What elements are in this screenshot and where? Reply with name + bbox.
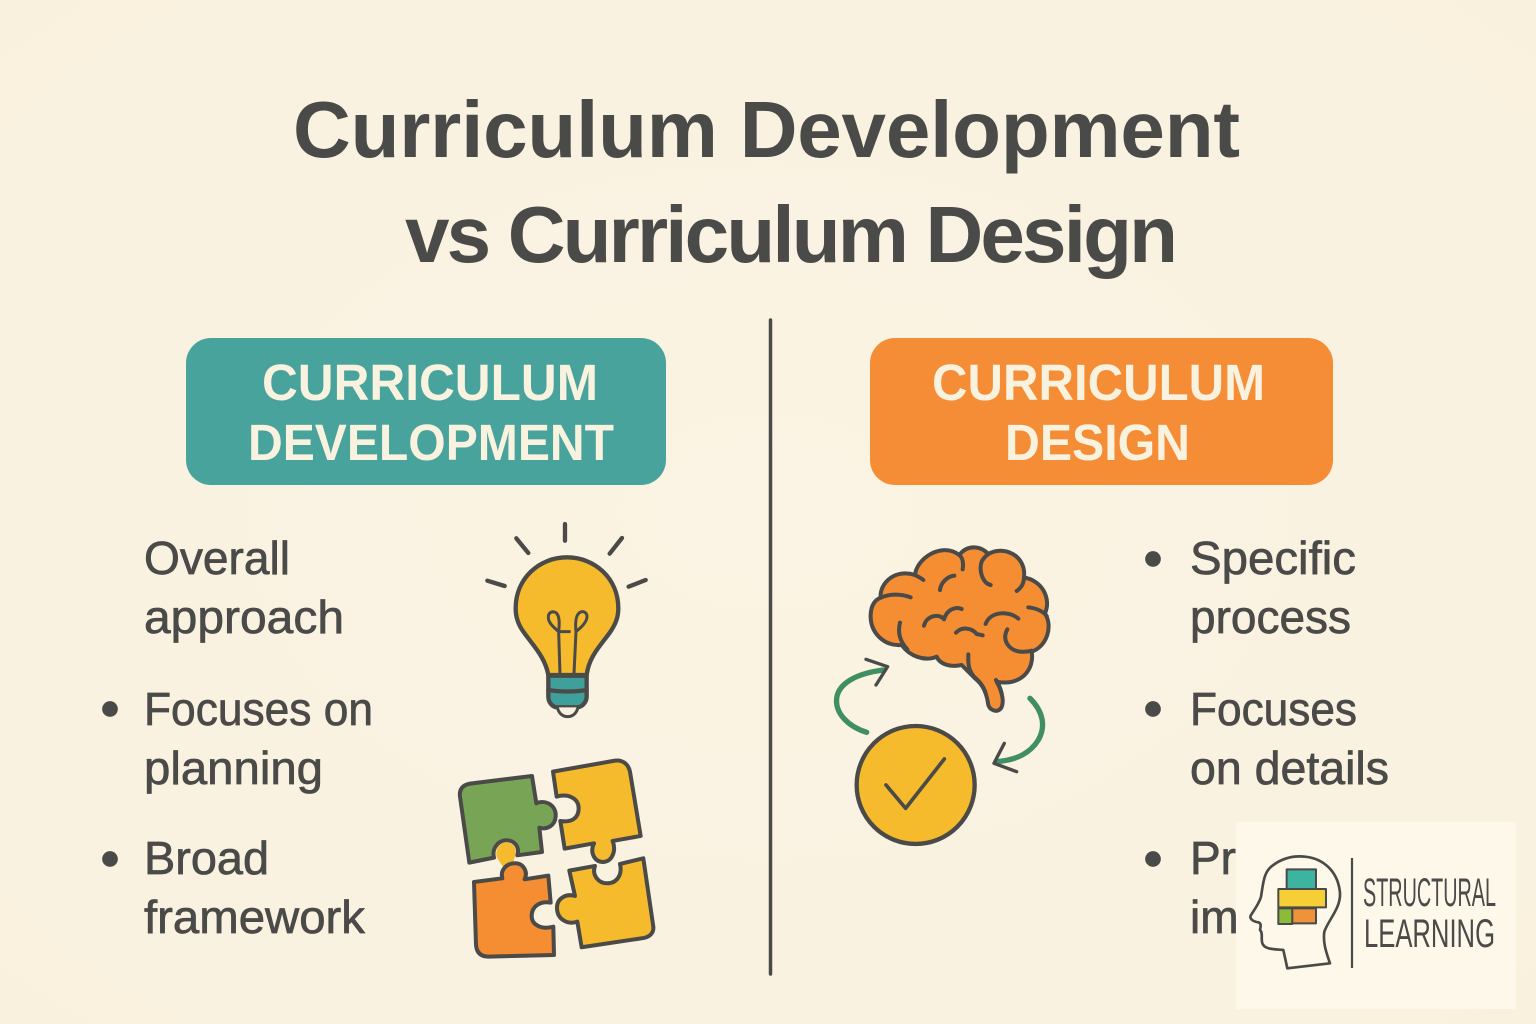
puzzle piece: bottom right [557, 858, 653, 947]
heading badge: curriculum design: DESIGN [1005, 414, 1190, 471]
bullet list: development: Broad [144, 832, 269, 884]
puzzle piece: top right [553, 760, 641, 862]
bullet list: design: process [1190, 591, 1351, 643]
bullet list: development: Overall [144, 532, 290, 584]
bullet list: design: im [1190, 891, 1239, 943]
brain [871, 547, 1049, 711]
puzzle connector [496, 843, 516, 867]
check circle [857, 726, 975, 844]
bullet list: design: Pr [1190, 832, 1236, 884]
puzzle piece: green [460, 776, 556, 863]
bullet list: development [102, 532, 373, 943]
bullet list: development: framework [144, 891, 366, 943]
panel: curriculum development [102, 338, 666, 957]
bullet list: development: approach [144, 591, 344, 643]
bullet list: design: on details [1190, 742, 1389, 794]
center divider [769, 320, 772, 974]
title: Curriculum Development [293, 85, 1240, 174]
bullet list: design: Focuses [1190, 683, 1357, 735]
title: vs Curriculum Design [405, 190, 1178, 279]
cycle arrow: left [837, 659, 888, 732]
puzzle piece: orange [474, 863, 554, 957]
logo wordmark [1363, 871, 1496, 956]
bullet list: development: planning [144, 742, 323, 794]
cycle arrow: right [994, 698, 1043, 772]
heading badge: curriculum development [186, 338, 666, 485]
logo divider [1351, 858, 1353, 968]
heading badge: curriculum development: CURRICULUM [262, 354, 598, 411]
panel: curriculum design [837, 338, 1389, 943]
icon: light bulb [487, 524, 646, 717]
bullet list: design: Specific [1190, 532, 1356, 584]
heading badge: curriculum design [870, 338, 1333, 485]
heading badge: curriculum development: DEVELOPMENT [248, 414, 614, 471]
icon: jigsaw puzzle [460, 760, 653, 957]
title [293, 85, 1240, 279]
logo icon: head with blocks [1250, 856, 1340, 968]
logo: structural learning [1236, 822, 1516, 1009]
bullet list: development: Focuses on [144, 683, 373, 735]
icon: brain with review cycle [837, 547, 1049, 844]
bullet list: design [1146, 532, 1389, 943]
heading badge: curriculum design: CURRICULUM [932, 354, 1265, 411]
